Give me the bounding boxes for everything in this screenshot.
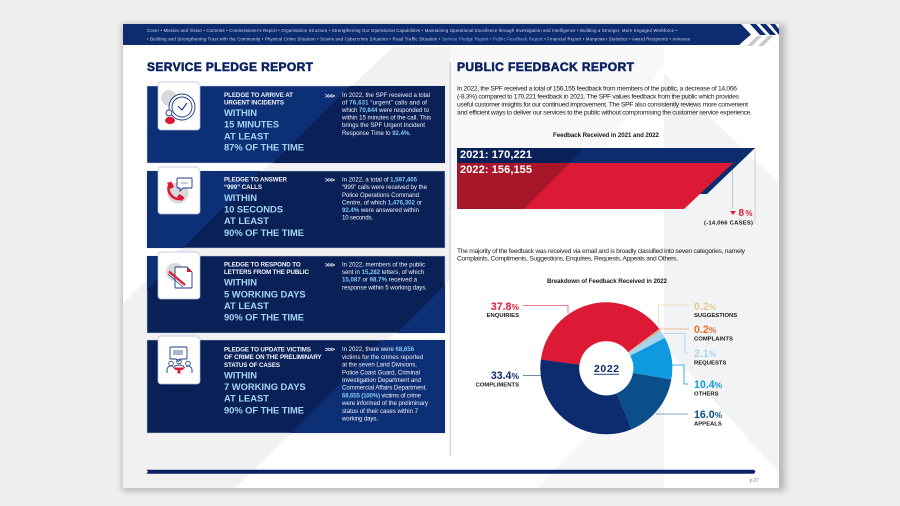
label: others: 10.4% xyxy=(694,379,723,391)
donut centre label: 2022 xyxy=(594,364,619,375)
label: requests xyxy=(663,334,726,366)
result text: 92.4% were answered within xyxy=(342,207,419,214)
pledge heading: PLEDGE TO ANSWER xyxy=(224,177,288,184)
navigation banner xyxy=(123,24,779,46)
result text: “999” calls were received by the xyxy=(342,184,428,191)
icon: group of people meeting xyxy=(158,336,200,384)
result text: response within 5 working days. xyxy=(342,284,427,291)
label: requests: 2.1% xyxy=(694,348,717,360)
arrows: >>> xyxy=(325,93,335,100)
pledge heading xyxy=(224,92,293,107)
pledge heading: “999” CALLS xyxy=(224,184,262,191)
result text: Centre, of which 1,476,302 or xyxy=(342,199,422,206)
navigation banner: • Building and Strengthening Trust with the Community • Physical Crime Situation • Scams and Cybercrime Situation • Road Traffic Situation • Service Pledge Report • Public Feedback Report • Financial Report • Manpower Statistics • Award Recipients • Annexes xyxy=(147,36,690,41)
result text: Response Time to 92.4%. xyxy=(342,130,411,137)
pledge target: 7 WORKING DAYS xyxy=(224,381,306,392)
heading: service pledge report: SERVICE PLEDGE REPORT xyxy=(147,60,314,74)
pledge heading xyxy=(224,261,310,276)
pledge target xyxy=(224,192,304,238)
label: enquiries: ENQUIRIES xyxy=(487,313,519,319)
panel: pledge to update victims of crime xyxy=(147,336,445,433)
pledge target xyxy=(224,277,306,323)
pledge target: 10 SECONDS xyxy=(224,204,283,214)
result text xyxy=(342,176,428,222)
result text: sent in 15,282 letters, of which xyxy=(342,269,424,276)
pledge target: 5 WORKING DAYS xyxy=(224,288,306,299)
label: complaints xyxy=(659,324,733,342)
label: complaints: 0.2% xyxy=(694,324,717,336)
label: enquiries xyxy=(487,301,568,319)
body paragraph: Complaints, Compliments, Suggestions, Enquiries, Requests, Appeals and Others. xyxy=(457,256,678,263)
label: compliments xyxy=(475,370,541,388)
result text: were informed of the preliminary xyxy=(341,400,429,407)
donut centre label xyxy=(579,341,633,395)
pledge target: 87% OF THE TIME xyxy=(224,142,304,153)
label: appeals xyxy=(656,409,723,427)
result text: Police Coast Guard, Criminal xyxy=(342,369,420,376)
callout: 8 percent decrease: 8% xyxy=(738,208,752,219)
pledge heading xyxy=(224,346,323,369)
label: enquiries: 37.8% xyxy=(491,301,519,313)
column divider xyxy=(450,62,451,456)
heading: public feedback report: PUBLIC FEEDBACK REPORT xyxy=(457,60,635,74)
arrows: >>> xyxy=(325,177,335,184)
intro paragraph: (-8.3%) compared to 170,221 feedback in 2021. The SPF values feedback from the public which provides xyxy=(457,93,740,100)
result text: of 76,631 “urgent” calls and of xyxy=(342,99,427,106)
pledge heading: URGENT INCIDENTS xyxy=(224,100,284,107)
arrows: >>> xyxy=(325,347,335,354)
label: suggestions: 0.2% xyxy=(694,301,717,313)
pledge target xyxy=(224,107,304,153)
bar chart: feedback 2021 and 2022 xyxy=(457,148,755,224)
donut chart xyxy=(541,303,671,433)
result text: at the seven Land Divisions, xyxy=(342,362,417,369)
intro paragraph: and efficient ways to deliver our services to the public without compromising the customer service experience. xyxy=(457,109,752,116)
pledge target xyxy=(224,369,306,415)
label: others: OTHERS xyxy=(694,391,719,397)
intro paragraph: In 2022, the SPF received a total of 156,155 feedback from members of the public, a decrease of 14,066 xyxy=(457,85,737,92)
icon: letter and pen xyxy=(158,252,200,299)
pledge target: WITHIN xyxy=(224,369,257,380)
result text: 10 seconds. xyxy=(342,215,373,222)
page background xyxy=(123,24,779,488)
result text: which 70,844 were responded to xyxy=(341,107,430,114)
result text: 68,655 (100%) victims of crime xyxy=(342,392,422,399)
intro paragraph: useful customer insights for our continued improvement. The SPF also consistently reviews more convenient xyxy=(457,101,748,108)
chart title: breakdown: Breakdown of Feedback Received in 2022 xyxy=(547,278,668,285)
result text: within 15 minutes of the call. This xyxy=(341,115,431,122)
label: appeals: APPEALS xyxy=(694,421,722,427)
pledge heading: PLEDGE TO ARRIVE AT xyxy=(224,92,293,99)
label: suggestions: SUGGESTIONS xyxy=(694,313,737,319)
result text xyxy=(341,346,429,422)
pledge heading: PLEDGE TO UPDATE VICTIMS xyxy=(224,346,311,353)
callout: 8 percent decrease xyxy=(704,208,753,226)
body paragraph xyxy=(457,248,746,263)
page number: p.27 xyxy=(750,478,759,482)
label: others xyxy=(672,365,723,397)
pledge target: AT LEAST xyxy=(224,215,269,226)
navigation banner: Cover • Mission and Vision • Contents • Commissioner's Report • Organisation Structure • Strengthening Our Operational Capabilities • Maintaining Operational Excellence through Investigation and Intelligence • Building a Stronger, More Engaged Workforce • xyxy=(147,28,678,33)
icon: clock with person xyxy=(158,82,200,130)
label: complaints: COMPLAINTS xyxy=(694,336,733,342)
pledge target: 90% OF THE TIME xyxy=(224,227,304,238)
result text: status of their cases within 7 xyxy=(342,408,419,415)
label: requests: REQUESTS xyxy=(694,360,726,366)
panel: pledge to answer 999 calls xyxy=(147,167,445,248)
result text: Commercial Affairs Department. xyxy=(342,385,427,392)
label: compliments: 33.4% xyxy=(491,370,519,382)
pledge heading: PLEDGE TO RESPOND TO xyxy=(224,261,301,268)
bar chart: feedback 2021 and 2022: 2021: 170,221 xyxy=(460,149,532,161)
result text: brings the SPF Urgent Incident xyxy=(342,122,425,129)
result text: 15,087 or 98.7% received a xyxy=(342,277,418,284)
pledge target: AT LEAST xyxy=(224,130,269,141)
pledge heading: STATUS OF CASES xyxy=(224,362,280,369)
pledge target: AT LEAST xyxy=(224,393,269,404)
pledge target: WITHIN xyxy=(224,192,257,203)
callout: 8 percent decrease: (-14,066 CASES) xyxy=(704,220,753,226)
result text: victims for the crimes reported xyxy=(342,354,423,361)
arrows: >>> xyxy=(325,262,335,269)
icon: phone and speech bubble xyxy=(158,167,200,214)
bar chart: feedback 2021 and 2022: 2022: 156,155 xyxy=(460,164,532,176)
footer bar xyxy=(146,470,756,474)
panel: pledge to arrive at urgent incidents xyxy=(147,82,445,163)
result text: In 2022, members of the public xyxy=(342,261,425,268)
pledge target: 15 MINUTES xyxy=(224,119,279,130)
result text: In 2022, there were 68,656 xyxy=(342,346,415,353)
result text: In 2022, the SPF received a total xyxy=(342,92,430,99)
result text xyxy=(341,92,431,137)
body paragraph: The majority of the feedback was received via email and is broadly classified into seven categories, namely xyxy=(457,248,746,255)
label: appeals: 16.0% xyxy=(694,409,723,421)
pledge target: WITHIN xyxy=(224,107,257,118)
panel: pledge to respond to letters xyxy=(147,252,445,333)
result text: Police Operations Command xyxy=(342,192,419,199)
result text: Investigation Department and xyxy=(342,377,421,384)
pledge target: 90% OF THE TIME xyxy=(224,312,304,323)
chart title: feedback received: Feedback Received in 2021 and 2022 xyxy=(553,132,660,139)
label: suggestions xyxy=(658,301,737,327)
pledge target: 90% OF THE TIME xyxy=(224,404,304,415)
pledge heading: LETTERS FROM THE PUBLIC xyxy=(224,269,310,276)
pledge heading: OF CRIME ON THE PRELIMINARY xyxy=(224,354,323,361)
pledge target: WITHIN xyxy=(224,277,257,288)
result text xyxy=(342,261,427,291)
result text: In 2022, a total of 1,597,405 xyxy=(342,176,418,184)
result text: working days. xyxy=(341,416,378,422)
pledge heading xyxy=(224,177,288,191)
label: compliments: COMPLIMENTS xyxy=(475,382,519,388)
intro paragraph xyxy=(457,85,752,116)
pledge target: AT LEAST xyxy=(224,300,269,311)
